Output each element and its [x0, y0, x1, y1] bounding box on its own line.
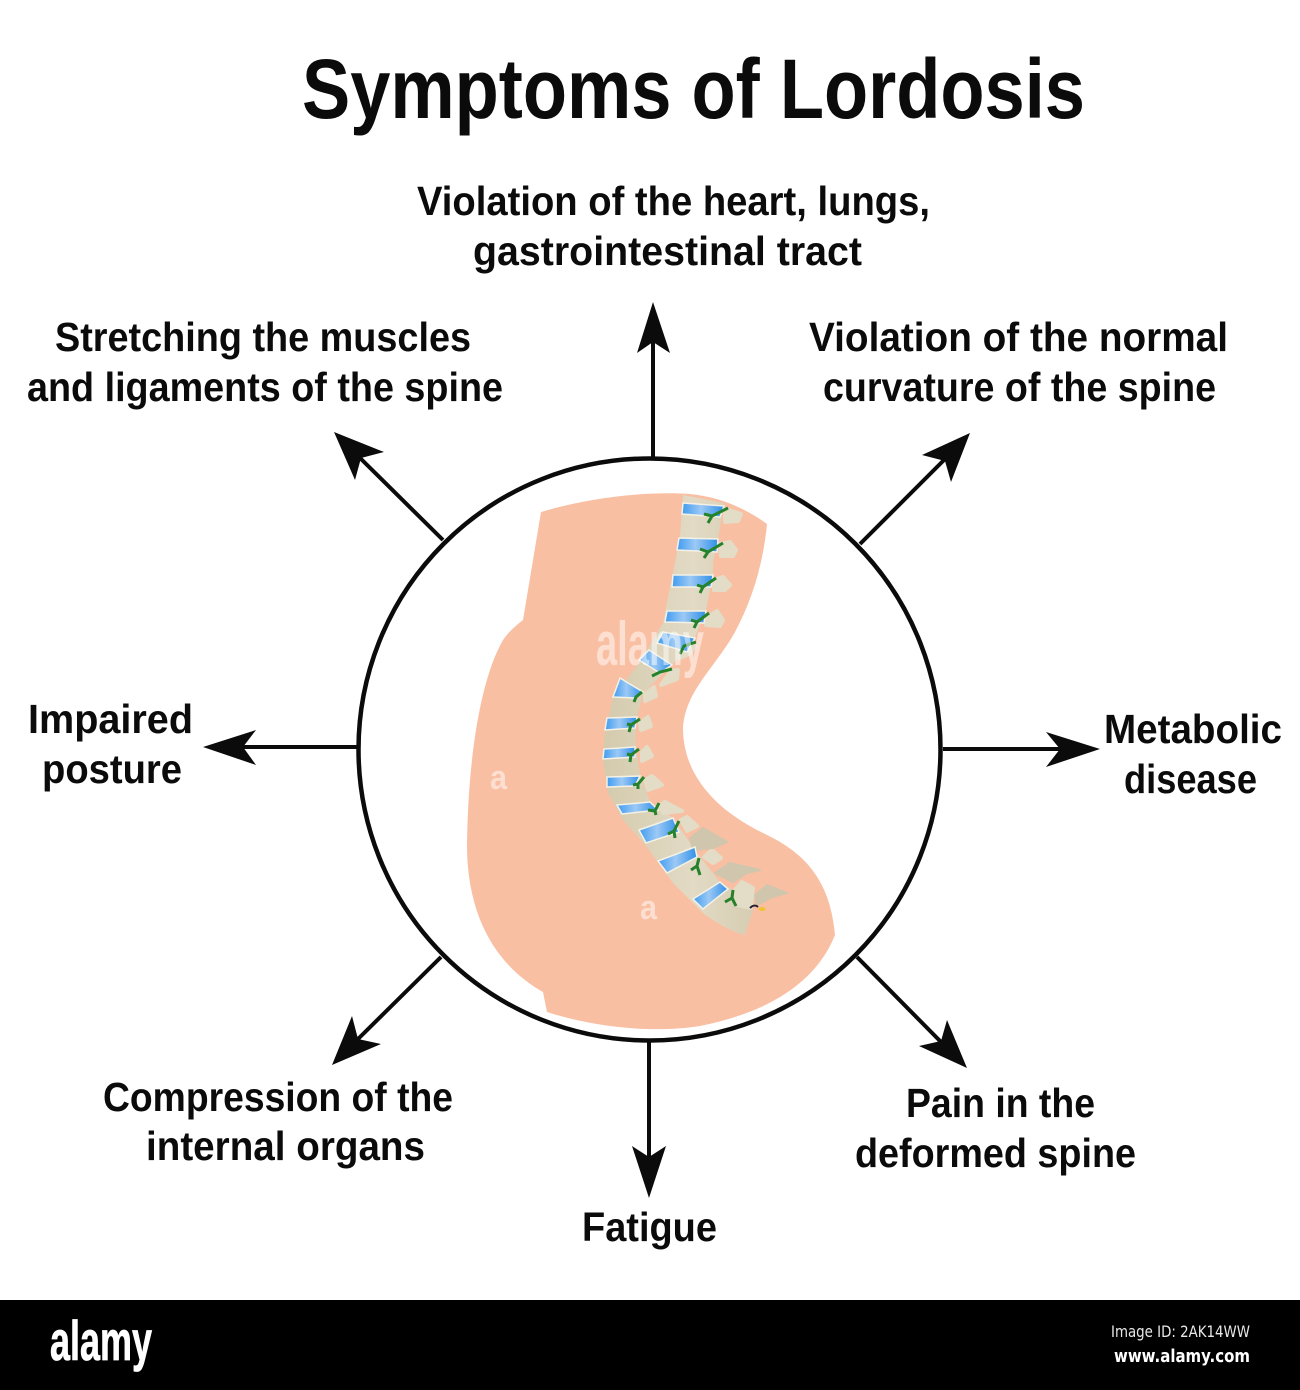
website: www.alamy.com — [1114, 1346, 1250, 1367]
label: violation of normal curvature: curvature of the spine — [823, 364, 1216, 410]
footer logo: alamy — [50, 1309, 152, 1372]
footer bar — [0, 1300, 1300, 1390]
label: fatigue: Fatigue — [582, 1204, 717, 1250]
watermark: alamy — [596, 610, 704, 679]
label: heart, lungs, gastrointestinal tract: gastrointestinal tract — [473, 228, 862, 274]
label: heart, lungs, gastrointestinal tract: Violation of the heart, lungs, — [417, 178, 930, 224]
label: pain in the deformed spine: Pain in the — [906, 1080, 1095, 1126]
label: compression of internal organs: internal organs — [146, 1123, 425, 1169]
spinous processes — [640, 509, 753, 908]
body silhouette — [467, 493, 835, 1029]
label: stretching muscles and ligaments: and ligaments of the spine — [27, 364, 503, 410]
label: stretching muscles and ligaments: Stretching the muscles — [55, 314, 471, 360]
label: stretching muscles and ligaments — [27, 314, 503, 410]
transverse processes — [690, 828, 787, 905]
label: compression of internal organs: Compression of the — [103, 1074, 453, 1120]
intervertebral discs — [603, 503, 728, 909]
label: impaired posture — [28, 696, 193, 792]
label: compression of internal organs — [103, 1074, 453, 1169]
label: metabolic disease: Metabolic — [1104, 706, 1282, 752]
arrow: upper right — [860, 433, 970, 544]
nerve root spot — [758, 907, 766, 911]
label: violation of normal curvature: Violation of the normal — [809, 314, 1228, 360]
label: impaired posture: posture — [42, 746, 182, 792]
arrow: lower right — [857, 957, 967, 1068]
vertebral column — [603, 495, 753, 935]
nerve ending — [750, 906, 758, 908]
circle outline — [358, 458, 940, 1040]
label: violation of normal curvature — [809, 314, 1228, 410]
label: pain in the deformed spine: deformed spine — [855, 1130, 1136, 1176]
label: impaired posture: Impaired — [28, 696, 193, 742]
arrow: right — [943, 732, 1100, 767]
arrow: up — [637, 302, 670, 458]
watermark: a — [490, 759, 508, 797]
watermark: a — [640, 889, 658, 927]
figure: lordotic torso with spine — [467, 493, 835, 1029]
label: heart, lungs, gastrointestinal tract — [417, 178, 930, 274]
watermark — [490, 610, 704, 927]
label: pain in the deformed spine — [855, 1080, 1136, 1176]
spinal nerves — [627, 508, 736, 906]
arrow: lower left — [332, 957, 441, 1065]
label: metabolic disease: disease — [1124, 756, 1257, 802]
title: Symptoms of Lordosis — [302, 42, 1085, 136]
arrow: down — [632, 1042, 666, 1198]
arrow: upper left — [334, 432, 443, 540]
arrow: left — [203, 730, 357, 765]
label: metabolic disease — [1104, 706, 1282, 802]
image id: Image ID: 2AK14WW — [1111, 1322, 1250, 1341]
